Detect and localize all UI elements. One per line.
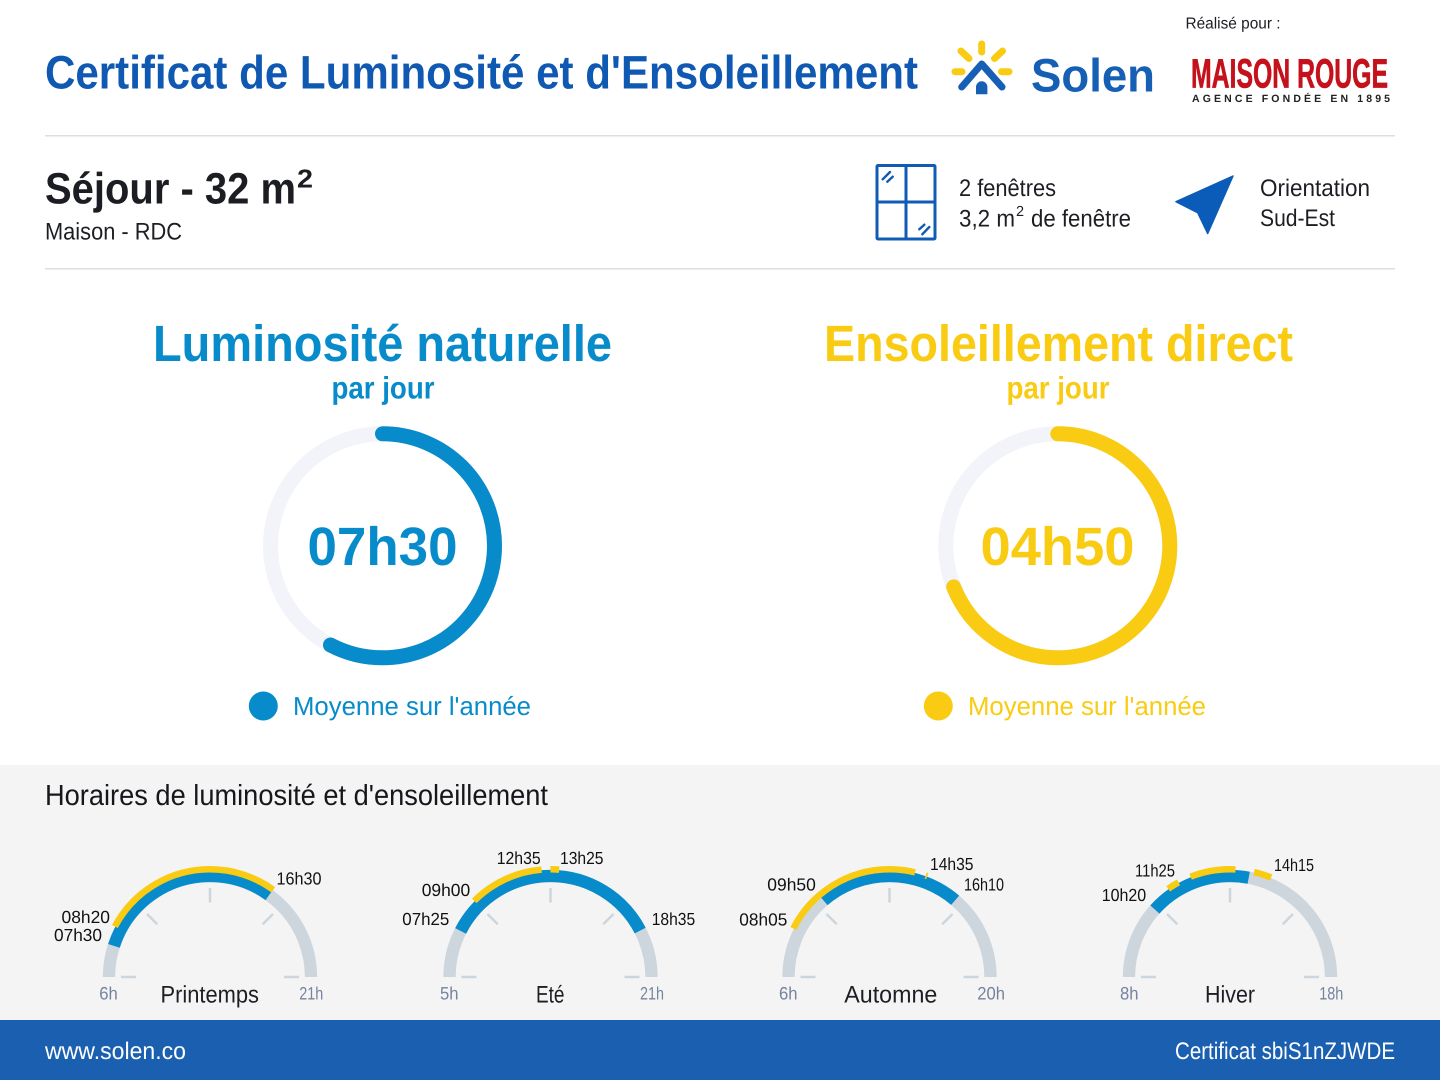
time labels <box>739 854 1005 1004</box>
time labels: 5h <box>440 984 458 1004</box>
time labels <box>54 868 323 1004</box>
website: www.solen.co <box>44 1038 186 1065</box>
room heading: 2 <box>297 164 313 194</box>
time labels: 09h50 <box>767 875 816 895</box>
panel: natural light <box>153 315 612 721</box>
orientation details: Sud-Est <box>1260 205 1335 232</box>
heading: Luminosité naturelle <box>153 315 612 372</box>
icon: window <box>877 166 935 239</box>
icon: house <box>962 64 1002 94</box>
room heading: Séjour - 32 m <box>45 164 296 214</box>
season label: Printemps <box>160 982 259 1008</box>
title: Certificat de Luminosité et d'Ensoleillement <box>45 46 918 98</box>
time labels: 14h35 <box>930 854 974 874</box>
subheading: par jour <box>1006 370 1110 406</box>
gauge: summer <box>402 848 695 1008</box>
time labels: 13h25 <box>560 848 604 868</box>
time labels <box>402 848 695 1004</box>
time labels: 21h <box>299 984 323 1004</box>
time labels: 10h20 <box>1102 885 1146 905</box>
donut chart <box>270 434 494 658</box>
footer <box>0 1020 1440 1080</box>
window details: 3,2 m <box>959 206 1015 232</box>
logo: Maison Rouge <box>1191 50 1390 105</box>
window details: 2 fenêtres <box>959 175 1056 202</box>
time labels <box>1102 855 1343 1004</box>
time labels: 12h35 <box>497 848 541 868</box>
season label: Automne <box>844 982 937 1008</box>
time labels: 09h00 <box>422 880 470 900</box>
orientation details <box>1260 175 1370 232</box>
logo tagline: AGENCE FONDÉE EN 1895 <box>1192 92 1390 105</box>
time labels: 20h <box>977 984 1005 1004</box>
time labels: 16h30 <box>276 868 322 888</box>
time labels: 6h <box>779 984 798 1004</box>
section heading: Horaires de luminosité et d'ensoleillement <box>45 780 548 812</box>
gauge: spring <box>54 868 323 1008</box>
legend: Moyenne sur l'année <box>968 691 1206 721</box>
subheading: par jour <box>332 370 434 406</box>
season label: Eté <box>536 982 564 1008</box>
window details <box>959 175 1131 232</box>
time labels: 08h20 <box>62 907 110 927</box>
time labels: 6h <box>99 984 118 1004</box>
window details: de fenêtre <box>1031 206 1131 232</box>
orientation details: Orientation <box>1260 175 1370 202</box>
heading: Ensoleillement direct <box>824 315 1293 372</box>
time labels: 8h <box>1120 984 1138 1004</box>
time labels: 07h30 <box>54 925 102 945</box>
icon: sun rays <box>955 44 1009 72</box>
logo wordmark: Solen <box>1031 48 1155 102</box>
time labels: 07h25 <box>402 909 449 929</box>
arcs <box>1122 869 1338 977</box>
room subheading: Maison - RDC <box>45 218 182 246</box>
time labels: 11h25 <box>1135 861 1175 881</box>
logo: Solen <box>955 44 1155 102</box>
time labels: 18h35 <box>652 909 695 929</box>
time labels: 21h <box>640 984 664 1004</box>
panel: direct sunlight <box>824 315 1293 721</box>
time labels: 18h <box>1319 984 1343 1004</box>
donut chart <box>946 434 1170 658</box>
time labels: 08h05 <box>739 910 787 930</box>
certificate id: Certificat sbiS1nZJWDE <box>1175 1038 1395 1065</box>
gauge: autumn <box>739 854 1005 1008</box>
legend: Moyenne sur l'année <box>293 691 531 721</box>
season label: Hiver <box>1205 982 1255 1008</box>
arcs <box>443 869 658 977</box>
value: 07h30 <box>308 517 458 577</box>
icon: orientation arrow <box>1176 176 1233 234</box>
value: 04h50 <box>980 517 1134 577</box>
arcs <box>782 869 997 977</box>
time labels: 14h15 <box>1274 855 1314 875</box>
time labels: 16h10 <box>964 875 1004 895</box>
panel: schedules <box>0 765 1440 1020</box>
gauge: winter <box>1102 855 1343 1008</box>
made for label: Réalisé pour : <box>1186 16 1280 32</box>
arcs <box>102 869 318 977</box>
window details: 2 <box>1016 204 1024 220</box>
